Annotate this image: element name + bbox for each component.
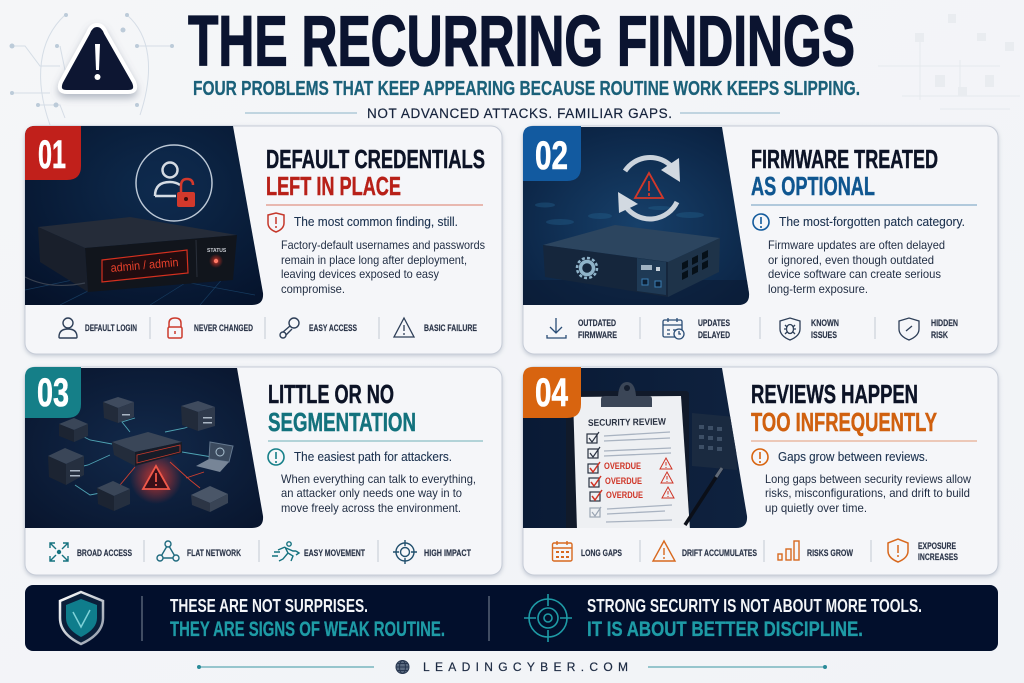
panel: 01 default credentials <box>25 126 502 354</box>
icon row: UPDATES <box>698 318 730 328</box>
heading: REVIEWS HAPPEN <box>751 379 918 409</box>
image: flat network <box>25 367 265 529</box>
body text: an attacker only needs one way in to <box>281 486 462 500</box>
icon: calendar <box>552 541 572 561</box>
heading: TOO INFREQUENTLY <box>751 407 937 437</box>
image: security review clipboard: OVERDUE <box>604 461 641 471</box>
icon row: LONG GAPS <box>581 548 622 558</box>
icon row: INCREASES <box>918 552 958 562</box>
icon row: RISKS GROW <box>807 548 853 558</box>
icon row: EXPOSURE <box>918 541 956 551</box>
icon row: RISK <box>931 330 948 340</box>
icon row: DRIFT ACCUMULATES <box>682 548 757 558</box>
icon row: BASIC FAILURE <box>424 323 477 333</box>
heading: AS OPTIONAL <box>751 171 875 201</box>
body text <box>768 238 945 296</box>
badge 02 <box>523 126 581 181</box>
body text: risks, misconfigurations, and drift to build <box>765 486 970 500</box>
message left <box>170 596 445 641</box>
icon: target <box>524 594 572 642</box>
lead text: The most-forgotten patch category. <box>779 214 965 229</box>
heading: SEGMENTATION <box>268 407 416 437</box>
heading: FIRMWARE TREATED <box>751 144 938 174</box>
icon row <box>50 540 471 564</box>
body text: Factory-default usernames and passwords <box>281 238 485 252</box>
icon row <box>59 317 477 339</box>
header circuit decoration: right <box>878 14 1020 109</box>
lead text: The easiest path for attackers. <box>294 449 452 464</box>
image: security review clipboard <box>523 367 753 531</box>
icon: user <box>59 318 77 338</box>
icon row: HIDDEN <box>931 318 958 328</box>
icon: bug shield <box>780 318 800 340</box>
icon: network nodes <box>157 541 179 561</box>
body text <box>765 472 971 515</box>
badge 01: 01 <box>38 133 66 177</box>
body text: up quietly over time. <box>765 501 867 515</box>
body text: move freely across the environment. <box>281 501 461 515</box>
icon: rising bars <box>778 541 799 560</box>
icon row: ISSUES <box>811 330 837 340</box>
icon: warning <box>653 541 675 561</box>
icon: download <box>547 318 566 338</box>
tagline: NOT ADVANCED ATTACKS. FAMILIAR GAPS. <box>367 106 672 121</box>
body text <box>281 472 476 515</box>
badge 01 <box>25 126 81 180</box>
icon row <box>552 539 958 562</box>
heading <box>268 379 416 437</box>
body text: Firmware updates are often delayed <box>768 238 945 252</box>
message right <box>587 596 922 641</box>
image: device with default login: STATUS <box>207 248 227 254</box>
badge 03 <box>25 367 81 418</box>
image: security review clipboard: OVERDUE <box>606 490 643 500</box>
icon: lock <box>168 318 182 338</box>
lead text: Gaps grow between reviews. <box>778 449 928 464</box>
body text <box>281 238 485 296</box>
icon: info alert <box>268 449 284 465</box>
lead text: The most common finding, still. <box>294 214 458 229</box>
heading: LITTLE OR NO <box>268 379 394 409</box>
checklist <box>587 432 672 522</box>
banner: conclusion <box>25 585 998 651</box>
heading <box>751 144 938 201</box>
body text: compromise. <box>281 282 345 296</box>
icon row: EASY MOVEMENT <box>304 548 365 558</box>
body text: remain in place long after deployment, <box>281 253 467 267</box>
body text: leaving devices exposed to easy <box>281 267 439 281</box>
message left: THESE ARE NOT SURPRISES. <box>170 596 368 616</box>
icon: shield <box>899 318 919 340</box>
icon row: NEVER CHANGED <box>194 323 253 333</box>
icon row: BROAD ACCESS <box>77 548 132 558</box>
icon: runner <box>272 542 299 561</box>
heading <box>751 379 937 437</box>
body text: or ignored, even though outdated <box>768 253 934 267</box>
icon row: DELAYED <box>698 330 730 340</box>
badge 02: 02 <box>535 134 568 178</box>
badge 04: 04 <box>535 371 569 415</box>
icon: warning triangle <box>60 25 135 92</box>
body text: When everything can talk to everything, <box>281 472 476 486</box>
image: security review clipboard: SECURITY REVIEW <box>588 417 666 429</box>
heading: DEFAULT CREDENTIALS <box>266 144 485 174</box>
footer <box>197 660 827 674</box>
panel: 04 reviews <box>523 367 998 575</box>
icon: warning <box>394 318 414 337</box>
icon: expand arrows <box>50 543 68 561</box>
icon: target <box>393 540 417 564</box>
image: device with default login: admin / admin <box>110 255 179 275</box>
panel: 03 segmentation <box>25 367 502 575</box>
icon: calendar clock <box>663 318 684 339</box>
icon row <box>547 317 958 340</box>
message right: IT IS ABOUT BETTER DISCIPLINE. <box>587 618 863 641</box>
badge 03: 03 <box>37 371 69 415</box>
server nodes <box>48 397 233 512</box>
icon: shield alert <box>268 213 284 232</box>
body text: long-term exposure. <box>768 282 868 296</box>
body text: device software can create serious <box>768 267 941 281</box>
icon: shield <box>60 592 103 644</box>
icon row: OUTDATED <box>578 318 616 328</box>
heading <box>266 144 485 201</box>
icon: shield alert <box>888 539 908 562</box>
icon: info alert <box>752 449 768 465</box>
icon: globe <box>396 660 409 674</box>
image: security review clipboard: OVERDUE <box>605 476 642 486</box>
panel: 02 firmware <box>523 126 998 354</box>
icon row: HIGH IMPACT <box>424 548 471 558</box>
icon: key <box>280 318 299 338</box>
icon row: FLAT NETWORK <box>187 548 241 558</box>
footer: LEADINGCYBER.COM <box>423 660 628 674</box>
badge 04 <box>523 367 581 418</box>
header circuit decoration: left <box>10 13 174 125</box>
message right: STRONG SECURITY IS NOT ABOUT MORE TOOLS. <box>587 596 922 616</box>
image: firmware device <box>523 126 753 306</box>
icon row: EASY ACCESS <box>309 323 357 333</box>
icon row: FIRMWARE <box>578 330 617 340</box>
message left: THEY ARE SIGNS OF WEAK ROUTINE. <box>170 618 445 641</box>
icon row: DEFAULT LOGIN <box>85 323 137 333</box>
icon: info alert <box>753 214 769 230</box>
heading: LEFT IN PLACE <box>266 171 401 201</box>
icon row: KNOWN <box>811 318 839 328</box>
body text: Long gaps between security reviews allow <box>765 472 971 486</box>
image: device with default login <box>25 126 265 306</box>
